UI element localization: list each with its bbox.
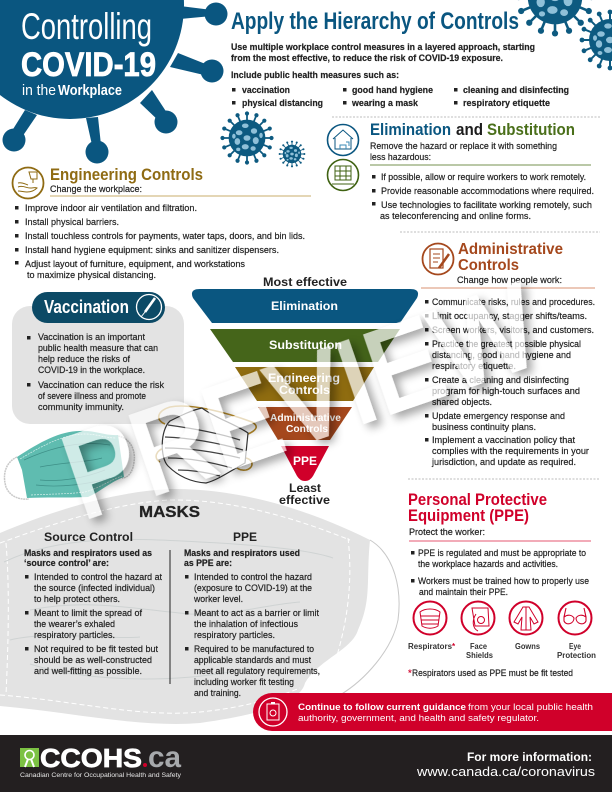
title: Controlling [21, 6, 152, 47]
panel: administrative controls: Limit occupancy, stagger shifts/teams. [432, 311, 587, 322]
panel: elimination and substitution [370, 121, 594, 222]
icon: respirators [414, 602, 446, 634]
footer bar [0, 735, 612, 792]
panel: administrative controls [421, 241, 595, 468]
text: PPE column: Required to be manufactured to [194, 644, 314, 655]
text: PPE column: applicable standards and must [194, 655, 311, 666]
panel: elimination and substitution: If possible, allow or require workers to work remotely. [381, 172, 586, 183]
text: PPE column: and training. [194, 688, 241, 699]
panel: vaccination: of severe illness and promote [38, 391, 146, 402]
text: source control column: to help protect others. [34, 594, 120, 605]
panel: administrative controls: Practice the greatest possible physical [432, 339, 581, 350]
text: PPE column: Intended to control the hazard [194, 572, 312, 583]
text: PPE column: Meant to act as a barrier or limit [194, 608, 319, 619]
intro text and public health measures: Include public health measures such as: [231, 70, 399, 81]
text: source control column: should be as well-constructed [34, 655, 152, 666]
icon labels: Eye [569, 642, 581, 651]
panel: personal protective equipment: PPE is regulated and must be appropriate to [418, 548, 586, 559]
panel: personal protective equipment: Workers must be trained how to properly use [418, 576, 589, 587]
logo text: CCOHS [40, 743, 142, 773]
intro text and public health measures: respiratory etiquette [463, 98, 550, 109]
text: PPE column: respiratory particles. [194, 630, 275, 641]
hierarchy pyramid: Engineering [268, 371, 340, 385]
intro text and public health measures: wearing a mask [351, 98, 419, 109]
logo text: Canadian Centre for Occupational Health and Safety [20, 772, 182, 779]
panel: administrative controls: distancing, good hand hygiene and [432, 350, 571, 361]
panel: administrative controls: Implement a vaccination policy that [432, 435, 575, 446]
panel: administrative controls: complies with the requirements in your [432, 446, 590, 457]
panel: masks comparison: MASKS [139, 504, 200, 521]
footnote: * [408, 668, 412, 679]
panel: personal protective equipment: Protect the worker: [409, 527, 485, 538]
text: source control column: the wearer’s exhaled [34, 619, 115, 630]
icon labels: Gowns [515, 642, 541, 651]
icon labels: Protection [557, 651, 596, 660]
icon: top right viruses [515, 0, 612, 70]
panel: masks comparison: Source Control [44, 532, 133, 544]
text: source control column: respiratory particles. [34, 630, 115, 641]
text: PPE column: (exposure to COVID-19) at the [194, 583, 312, 594]
panel: personal protective equipment: Equipment (PPE) [408, 507, 529, 525]
icon labels: Respirators [408, 642, 453, 651]
panel: vaccination: COVID-19 in the workplace. [38, 365, 145, 376]
large virus title badge [0, 0, 228, 164]
title: COVID-19 [21, 46, 156, 84]
panel: administrative controls: Create a cleaning and disinfecting [432, 375, 569, 386]
panel: engineering controls: Install hand hygiene equipment: sinks and sanitizer dispensers. [25, 245, 279, 256]
panel: elimination and substitution: Remove the hazard or replace it with something [370, 141, 557, 152]
icon: face shields [462, 602, 494, 634]
icon labels: * [452, 642, 456, 651]
text: PPE column: worker level. [193, 594, 243, 605]
hierarchy pyramid: Elimination [271, 299, 338, 313]
panel: engineering controls: Install touchless controls for payments, water taps, doors, and bin lids. [25, 231, 305, 242]
icon: engineering hand and dispenser [12, 168, 44, 198]
panel: administrative controls: Administrative [458, 241, 563, 258]
panel: administrative controls: jurisdiction, and update as required. [431, 457, 576, 468]
text: source control column [24, 548, 162, 677]
panel: personal protective equipment: and maintain their PPE. [419, 587, 508, 598]
panel: vaccination [12, 292, 184, 424]
panel: elimination and substitution: and [456, 121, 483, 139]
text: source control column: the source (infected individual) [34, 583, 155, 594]
panel: administrative controls: business continuity plans. [432, 422, 536, 433]
panel: vaccination: public health measure that can [38, 343, 158, 354]
panel: elimination and substitution: less hazardous: [370, 152, 431, 163]
panel: masks comparison [24, 504, 320, 699]
panel: administrative controls: shared objects. [432, 397, 492, 408]
text: PPE column: Masks and respirators used [184, 548, 300, 559]
text: source control column: Not required to be fit tested but [34, 644, 158, 655]
text: source control column: Meant to limit the spread of [34, 608, 142, 619]
intro text and public health measures: physical distancing [242, 98, 323, 109]
panel: administrative controls: Controls [458, 257, 519, 274]
panel: engineering controls: Change the workplace: [50, 184, 142, 195]
watermark: PREVIEW: PREVIEW [47, 259, 554, 544]
intro text and public health measures: cleaning and disinfecting [463, 85, 569, 96]
panel: administrative controls: program for high-touch surfaces and [432, 386, 580, 397]
panel: elimination and substitution: Use technologies to facilitate working remotely, such [381, 200, 592, 211]
text: PPE column: including worker fit testing [194, 677, 294, 688]
title: in the [22, 82, 56, 99]
icon: gowns [510, 602, 542, 634]
hierarchy pyramid: Controls [279, 383, 330, 397]
panel: engineering controls: to maximize physical distancing. [27, 270, 156, 281]
icon: medical clipboard [259, 698, 287, 726]
icon: eye protection [558, 602, 592, 634]
panel: administrative controls: Update emergency response and [432, 411, 565, 422]
panel: elimination and substitution: Provide reasonable accommodations where required. [381, 186, 594, 197]
panel: engineering controls: Improve indoor air ventilation and filtration. [25, 203, 197, 214]
icon labels: Shields [466, 651, 494, 660]
footnote: Respirators used as PPE must be fit tested [412, 668, 573, 679]
callout: current guidance banner: authority, government, and health and safety regulator. [298, 713, 539, 724]
hierarchy pyramid: PPE [293, 454, 317, 468]
callout: current guidance banner: from your local public health [468, 702, 593, 713]
title: Workplace [58, 82, 122, 99]
panel: vaccination: Vaccination [44, 297, 129, 317]
panel: personal protective equipment [408, 491, 596, 679]
icon: elimination house [328, 124, 358, 156]
heading: Apply the Hierarchy of Controls: Apply the Hierarchy of Controls [231, 8, 519, 35]
intro text and public health measures [231, 42, 569, 109]
intro text and public health measures: good hand hygiene [352, 85, 433, 96]
icon: CCOHS logo mark [20, 748, 39, 767]
hierarchy pyramid: Most effective [263, 275, 347, 289]
panel: elimination and substitution: Elimination [370, 121, 451, 139]
text: source control column: Intended to control the hazard at [34, 572, 162, 583]
panel: administrative controls: Communicate risks, rules and procedures. [432, 297, 595, 308]
panel: administrative controls: respiratory etiquette. [432, 361, 516, 372]
hierarchy pyramid [192, 275, 418, 507]
callout: current guidance banner [253, 693, 612, 731]
text: PPE column: the inhalation of infectious [194, 619, 298, 630]
icon labels: Face [470, 642, 488, 651]
text: source control column: ‘source control’ are: [24, 558, 109, 569]
masks background: gray cloth mask panel [0, 489, 399, 724]
panel: vaccination: community immunity. [38, 402, 124, 413]
intro text and public health measures: Use multiple workplace control measures in a layered approach, starting [231, 42, 535, 53]
text: PPE column: as PPE are: [184, 558, 232, 569]
panel: personal protective equipment: Personal Protective [408, 491, 547, 509]
icon: substitution laptop [328, 160, 358, 190]
panel: engineering controls: Adjust layout of furniture, equipment, and workstations [25, 259, 245, 270]
panel: vaccination: Vaccination can reduce the risk [38, 380, 164, 391]
illustration: respirator mask [156, 406, 256, 483]
text: source control column: Masks and respirators used as [24, 548, 152, 559]
illustration: surgical mask [4, 431, 134, 499]
more information [416, 750, 596, 779]
title [21, 6, 156, 99]
panel: engineering controls: Engineering Controls [50, 165, 203, 184]
icon: syringe [136, 294, 162, 320]
hierarchy pyramid: Least [289, 481, 321, 495]
icon: administrative clipboard [422, 244, 454, 274]
panel: administrative controls: Screen workers, visitors, and customers. [432, 325, 594, 336]
hierarchy pyramid: Controls [286, 424, 328, 435]
panel: elimination and substitution: Substitution [487, 121, 575, 139]
logo text [20, 741, 182, 779]
intro text and public health measures: vaccination [242, 85, 290, 96]
text: PPE column [184, 548, 320, 699]
icon: mid viruses [220, 111, 305, 167]
panel: masks comparison: PPE [233, 532, 257, 544]
panel: personal protective equipment: the workplace hazards and activities. [418, 559, 558, 570]
more information: For more information: [467, 750, 592, 764]
hierarchy pyramid: effective [279, 493, 330, 507]
panel: elimination and substitution: as teleconferencing and online forms. [380, 211, 531, 222]
icon labels [408, 642, 596, 660]
intro text and public health measures: from the most effective, to reduce the risk of COVID-19 exposure. [231, 53, 503, 64]
hierarchy pyramid: Substitution [269, 338, 342, 352]
hierarchy pyramid: Administrative [270, 413, 341, 424]
panel: engineering controls: Install physical barriers. [25, 217, 119, 228]
more information: www.canada.ca/coronavirus [416, 764, 596, 779]
logo text: ca [148, 741, 181, 774]
panel: engineering controls [15, 165, 311, 281]
panel: administrative controls: Change how people work: [457, 275, 562, 286]
panel: vaccination: help reduce the risks of [38, 354, 130, 365]
text: source control column: and well-fitting as possible. [34, 666, 142, 677]
callout: current guidance banner: Continue to follow current guidance [298, 702, 466, 713]
text: PPE column: meet all regulatory requirements, [194, 666, 320, 677]
panel: vaccination: Vaccination is an important [38, 332, 145, 343]
